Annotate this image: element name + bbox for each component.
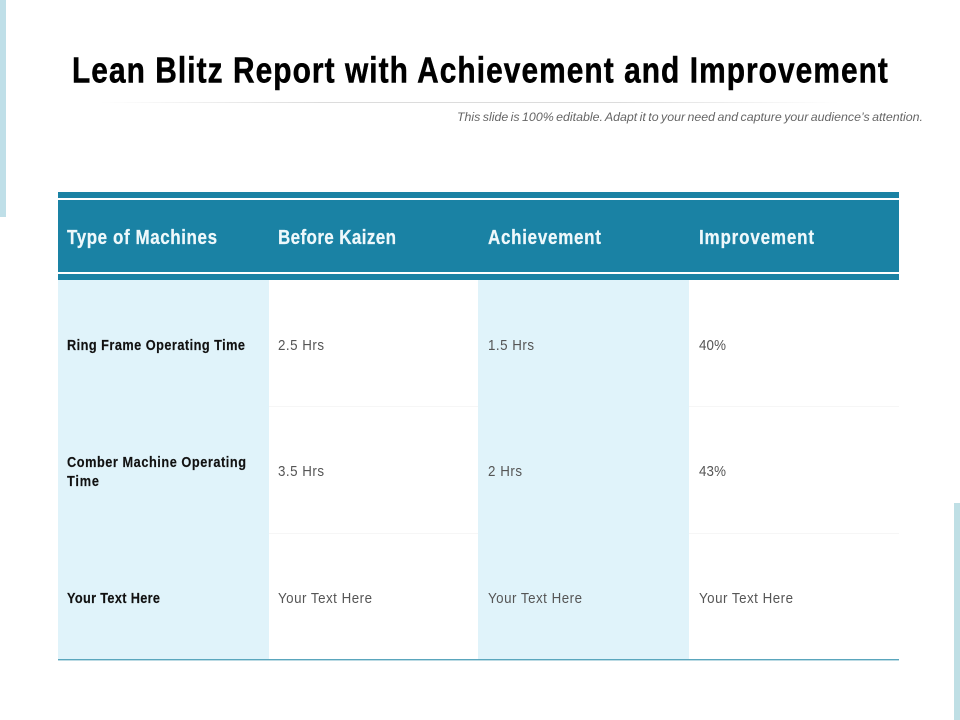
row: ring frame: 2.5 Hrs [278,336,324,353]
row: your text here: Your Text Here [699,589,793,606]
table [58,192,899,660]
title: Lean Blitz Report with Achievement and Improvement [72,51,888,91]
row: ring frame: 40% [699,336,726,353]
row: ring frame: Ring Frame Operating Time [67,337,245,353]
row: comber machine [67,454,726,489]
column 1 shading [58,280,269,660]
header: type of machines: Type of Machines [67,226,217,248]
row: your text here: Your Text Here [488,589,582,606]
left accent bar [0,0,6,217]
header: achievement: Achievement [488,226,601,248]
row: comber machine: 2 Hrs [488,462,522,479]
column 3 shading [478,280,689,660]
row: comber machine: 43% [699,462,726,479]
row: your text here: Your Text Here [67,590,160,606]
table header [58,192,899,280]
row: comber machine: Comber Machine Operating [67,454,246,470]
header: before kaizen: Before Kaizen [278,226,396,248]
row: your text here: Your Text Here [278,589,372,606]
row: comber machine: Time [67,473,99,489]
row: comber machine: 3.5 Hrs [278,462,324,479]
row: your text here [67,589,793,606]
header: improvement: Improvement [699,226,814,248]
row: ring frame [67,336,726,353]
subtitle: This slide is 100% editable. Adapt it to your need and capture your audience’s attention. [457,110,923,124]
right accent bar [954,503,960,720]
row: ring frame: 1.5 Hrs [488,336,534,353]
